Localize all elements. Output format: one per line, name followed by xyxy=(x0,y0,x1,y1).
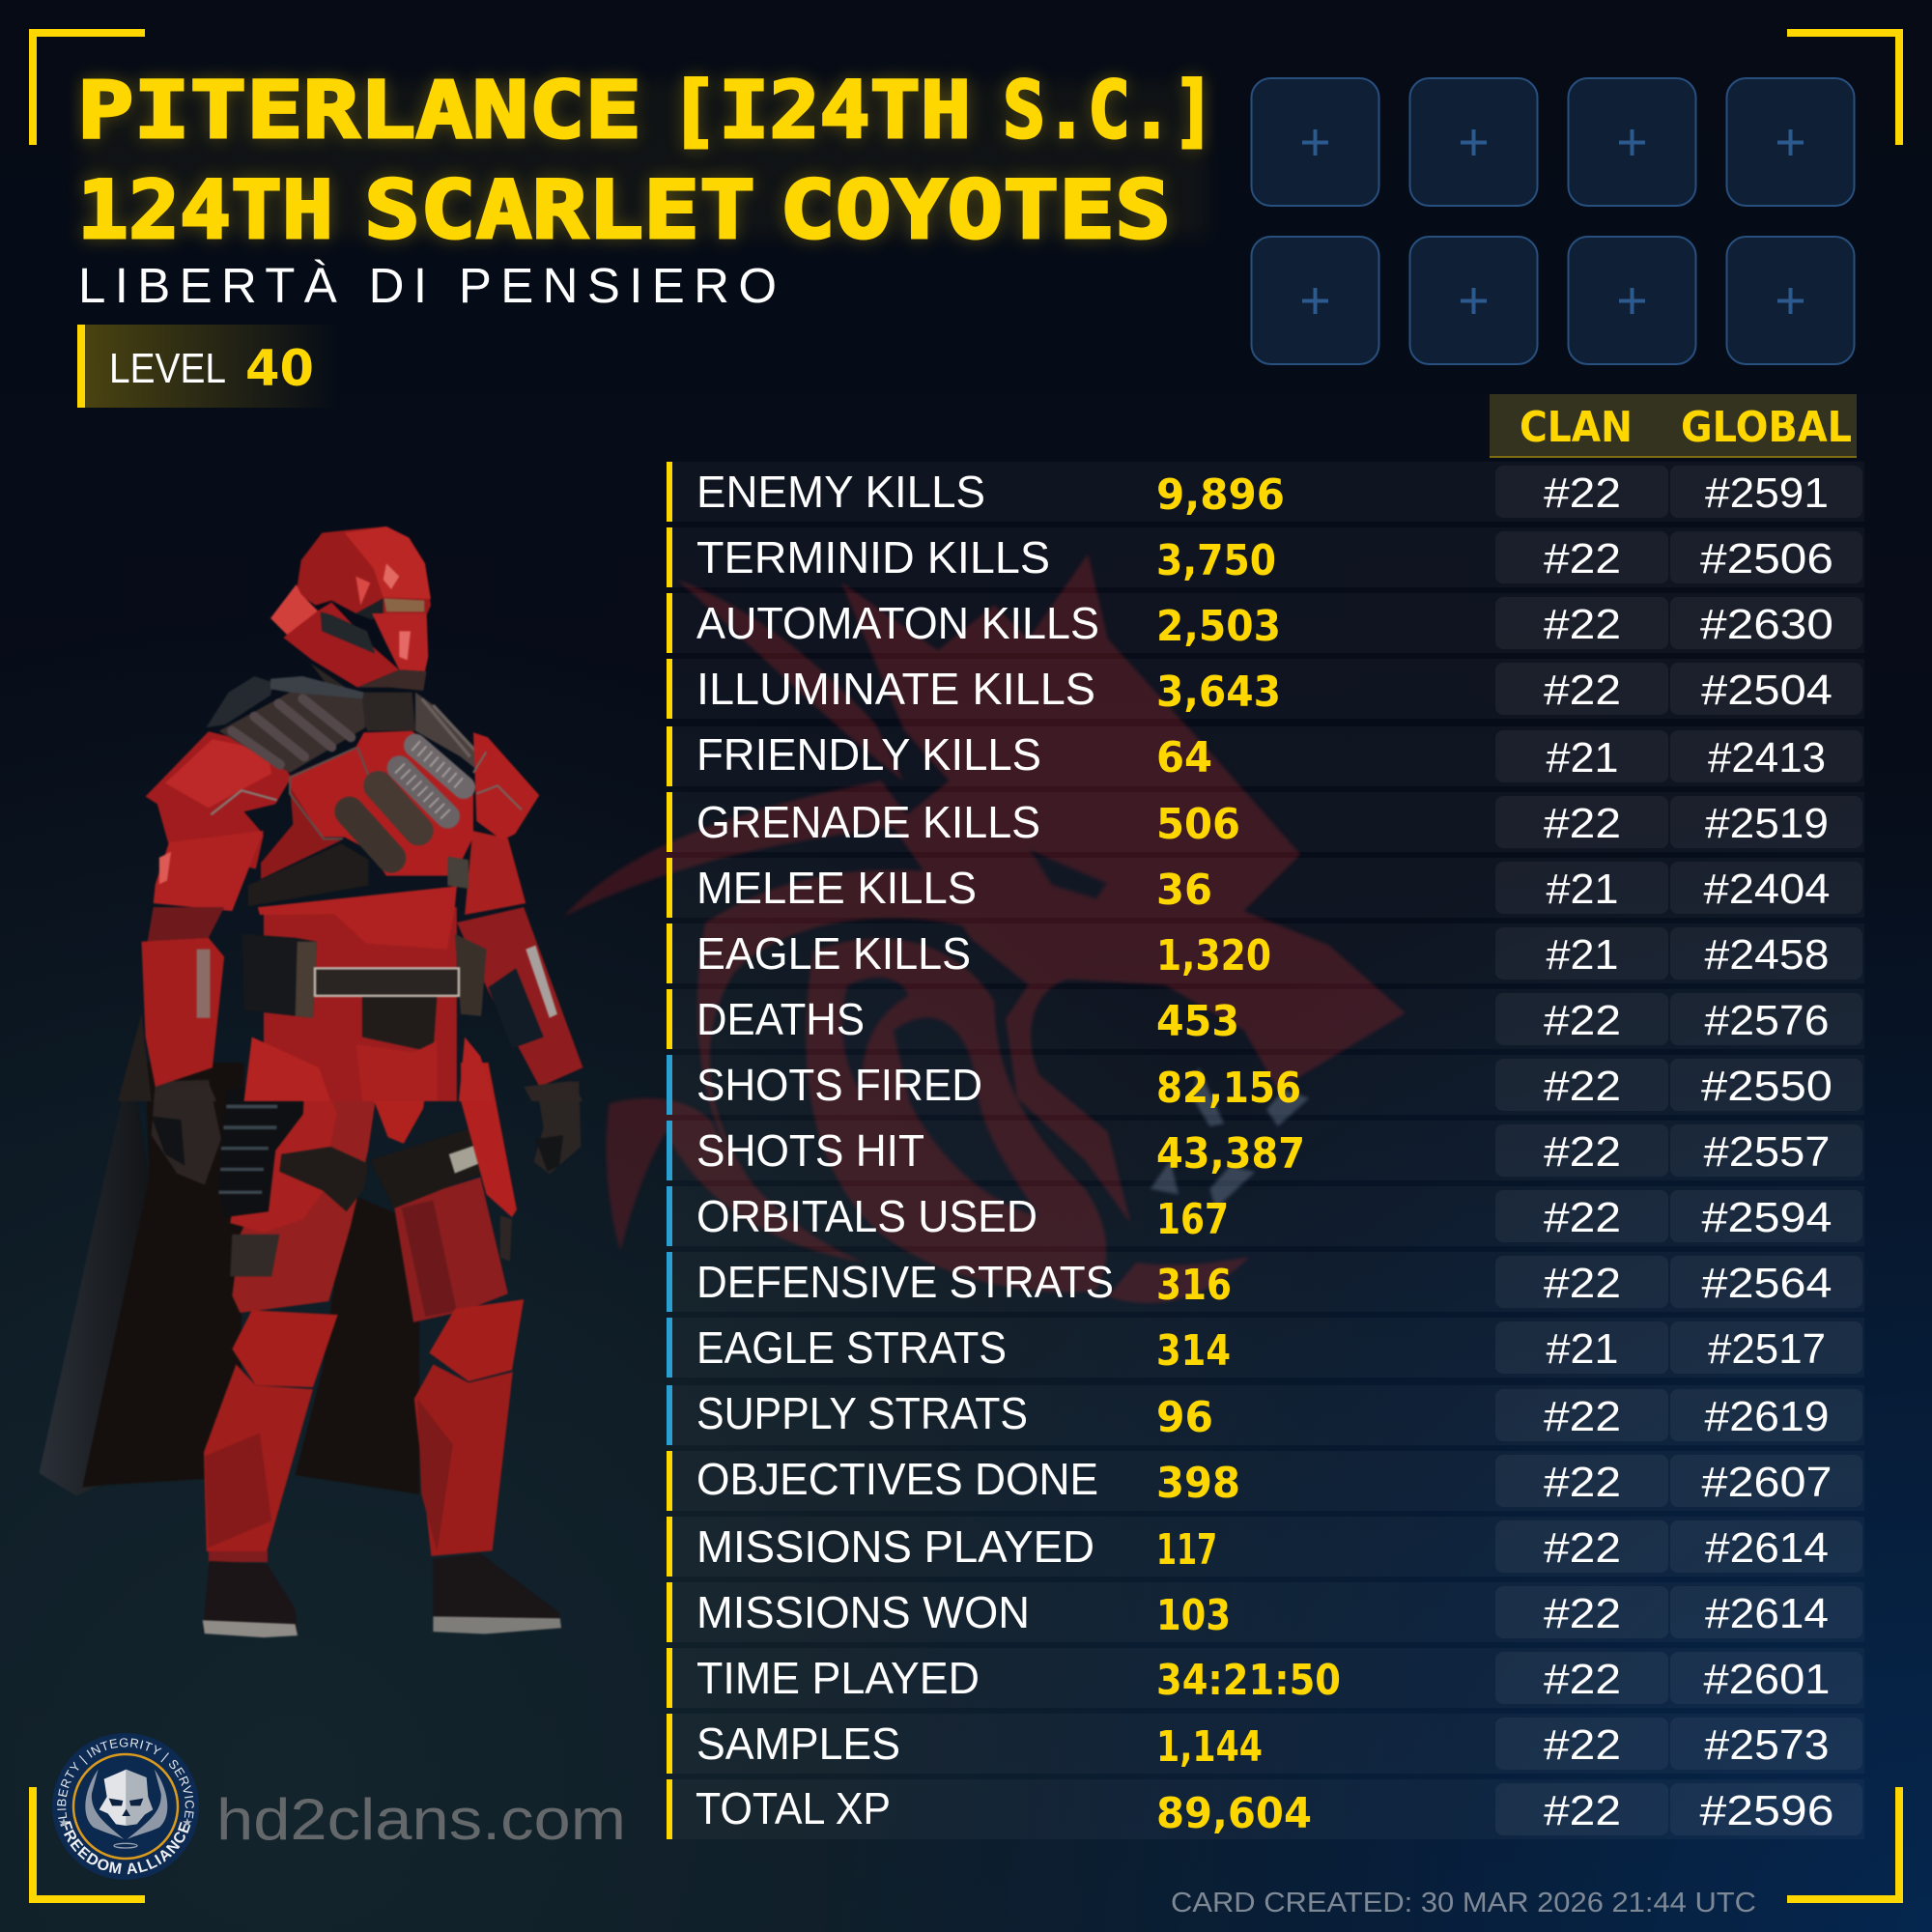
stat row: supply strats: 96 xyxy=(1156,1393,1213,1442)
stat row: objectives done xyxy=(667,1451,1864,1511)
corner bracket top-left xyxy=(29,29,145,145)
level label: LEVEL xyxy=(109,346,226,392)
stat row: objectives done: #22 xyxy=(1544,1460,1621,1506)
stat row: deaths: DEATHS xyxy=(696,994,865,1044)
slot 3 xyxy=(1569,78,1696,206)
stat row: samples: SAMPLES xyxy=(696,1719,900,1769)
stat row: eagle strats: 314 xyxy=(1156,1326,1231,1376)
table column header xyxy=(1490,394,1857,458)
stat row: total xp: 89,604 xyxy=(1156,1789,1312,1838)
slot 7 xyxy=(1569,237,1696,364)
stat row: enemy kills: 9,896 xyxy=(1156,470,1285,520)
global column heading: GLOBAL xyxy=(1681,403,1852,452)
stat row: samples: #22 xyxy=(1544,1722,1621,1769)
stat row: friendly kills: #2413 xyxy=(1708,735,1826,781)
stat row: enemy kills: #2591 xyxy=(1705,470,1829,517)
stat row: missions played xyxy=(667,1517,1864,1577)
stat row: defensive strats: DEFENSIVE STRATS xyxy=(696,1257,1114,1307)
stat row: illuminate kills: ILLUMINATE KILLS xyxy=(696,664,1095,714)
slot 2 xyxy=(1410,78,1538,206)
slot 1 xyxy=(1252,78,1379,206)
stat row: grenade kills: #2519 xyxy=(1705,801,1829,847)
slot 8 xyxy=(1727,237,1855,364)
stat row: deaths xyxy=(667,989,1864,1049)
stat row: friendly kills: #21 xyxy=(1546,735,1619,781)
stat row: objectives done: #2607 xyxy=(1702,1460,1832,1506)
stat row: samples: #2573 xyxy=(1704,1722,1830,1769)
freedom alliance badge xyxy=(52,1733,199,1880)
title line one: player name: PITERLANCE xyxy=(77,66,641,156)
stat row: deaths: #2576 xyxy=(1704,998,1830,1044)
stat row: automaton kills: #2630 xyxy=(1700,602,1833,648)
stat row: friendly kills: FRIENDLY KILLS xyxy=(696,729,1041,780)
stat row: eagle strats: #21 xyxy=(1546,1326,1619,1373)
title line two: clan name: 124TH xyxy=(77,163,333,257)
badge top ring text: LIBERTY | INTEGRITY | SERVICE xyxy=(57,1738,194,1819)
badge skull and laurels xyxy=(85,1770,167,1848)
stat row: samples xyxy=(667,1714,1864,1774)
stat row: objectives done: OBJECTIVES DONE xyxy=(696,1454,1098,1504)
corner bracket top-right xyxy=(1787,29,1903,145)
stat row: illuminate kills xyxy=(667,659,1864,719)
stat row: total xp: #22 xyxy=(1544,1788,1621,1834)
stat row: shots fired: SHOTS FIRED xyxy=(696,1060,982,1110)
stat row: melee kills: #21 xyxy=(1546,867,1619,913)
figure: armored helldiver in red armour and dark cape xyxy=(39,526,582,1637)
stat row: total xp: TOTAL XP xyxy=(696,1783,891,1833)
stat row: supply strats: SUPPLY STRATS xyxy=(696,1388,1028,1438)
stat row: friendly kills: 64 xyxy=(1156,733,1212,782)
stat row: shots hit xyxy=(667,1121,1864,1180)
stat row: time played: #2601 xyxy=(1704,1657,1830,1703)
stat row: grenade kills xyxy=(667,792,1864,852)
stat row: terminid kills: 3,750 xyxy=(1156,536,1276,585)
stat row: enemy kills: #22 xyxy=(1544,470,1621,517)
stat row: missions played: 117 xyxy=(1156,1525,1217,1575)
title glow xyxy=(80,82,1208,237)
stat row: orbitals used xyxy=(667,1186,1864,1246)
stat row: deaths: 453 xyxy=(1156,997,1239,1046)
stat row: melee kills: 36 xyxy=(1156,866,1212,915)
stat row: melee kills: MELEE KILLS xyxy=(696,863,977,913)
stat row: missions won xyxy=(667,1582,1864,1642)
stat row: orbitals used: 167 xyxy=(1156,1195,1229,1244)
stat row: supply strats: #2619 xyxy=(1704,1394,1830,1440)
clan column heading: CLAN xyxy=(1520,403,1633,452)
stat row: terminid kills: #2506 xyxy=(1700,536,1833,582)
stat row: supply strats xyxy=(667,1385,1864,1445)
stat row: missions played: #2614 xyxy=(1705,1525,1829,1572)
subtitle: LIBERTÀ DI PENSIERO xyxy=(78,258,777,313)
stat row: defensive strats xyxy=(667,1252,1864,1312)
title line one: player name xyxy=(77,66,1215,156)
stat row: shots fired xyxy=(667,1055,1864,1115)
stat row: eagle kills: #2458 xyxy=(1704,932,1830,979)
stat row: eagle kills: 1,320 xyxy=(1156,931,1271,980)
stat row: shots fired: #22 xyxy=(1544,1064,1621,1110)
stat row: missions won: #2614 xyxy=(1705,1591,1829,1637)
stat row: enemy kills: ENEMY KILLS xyxy=(696,467,985,517)
stat row: eagle kills: #21 xyxy=(1546,932,1619,979)
stat row: total xp xyxy=(667,1779,1864,1839)
stat row: objectives done: 398 xyxy=(1156,1459,1240,1508)
stat row: terminid kills: TERMINID KILLS xyxy=(696,532,1050,582)
stat row: melee kills xyxy=(667,858,1864,918)
figure torso and arms xyxy=(118,731,582,1101)
title line two: clan name xyxy=(77,163,1171,257)
card created timestamp: CARD CREATED: 30 MAR 2026 21:44 UTC xyxy=(1171,1888,1756,1918)
level badge xyxy=(77,325,338,408)
stat row: missions played: #22 xyxy=(1544,1525,1621,1572)
stat row: missions won: #22 xyxy=(1544,1591,1621,1637)
title line two: clan name: COYOTES xyxy=(780,163,1171,257)
stat row: eagle strats xyxy=(667,1318,1864,1378)
stat row: eagle kills xyxy=(667,923,1864,983)
stat row: eagle strats: #2517 xyxy=(1708,1326,1826,1373)
badge stars: ★ xyxy=(58,1815,70,1830)
stat row: grenade kills: 506 xyxy=(1156,800,1240,849)
stat row: deaths: #22 xyxy=(1544,998,1621,1044)
slot 4 xyxy=(1727,78,1855,206)
site url: hd2clans.com xyxy=(216,1787,626,1852)
stat row: orbitals used: #22 xyxy=(1544,1195,1621,1241)
stat row: time played: TIME PLAYED xyxy=(696,1653,980,1703)
stat row: shots fired: 82,156 xyxy=(1156,1064,1301,1113)
watermark: red coyote clan logo xyxy=(563,554,1406,1303)
stat row: defensive strats: #2564 xyxy=(1702,1261,1832,1307)
title block xyxy=(77,66,1215,313)
stat row: time played: #22 xyxy=(1544,1657,1621,1703)
stat row: shots hit: 43,387 xyxy=(1156,1129,1305,1179)
stat row: shots hit: #22 xyxy=(1544,1129,1621,1176)
stat row: grenade kills: #22 xyxy=(1544,801,1621,847)
stat row: illuminate kills: #22 xyxy=(1544,668,1621,714)
badge stars: ★ xyxy=(182,1815,193,1830)
stat row: orbitals used: #2594 xyxy=(1702,1195,1832,1241)
stat row: grenade kills: GRENADE KILLS xyxy=(696,797,1040,847)
badge bottom ring text: FREEDOM ALLIANCE xyxy=(60,1821,191,1874)
stat row: shots fired: #2550 xyxy=(1701,1064,1833,1110)
figure helmet, shoulders and chest xyxy=(206,526,539,906)
slot 5 xyxy=(1252,237,1379,364)
stat row: shots hit: #2557 xyxy=(1704,1129,1830,1176)
stat row: automaton kills: 2,503 xyxy=(1156,602,1281,651)
stat row: total xp: #2596 xyxy=(1700,1788,1833,1834)
stat row: automaton kills: #22 xyxy=(1544,602,1621,648)
level value: 40 xyxy=(245,340,314,398)
stat row: time played xyxy=(667,1648,1864,1708)
strategem slots grid xyxy=(1252,78,1855,364)
stat row: friendly kills xyxy=(667,726,1864,786)
stat row: illuminate kills: 3,643 xyxy=(1156,668,1281,717)
stat row: supply strats: #22 xyxy=(1544,1394,1621,1440)
stat row: automaton kills: AUTOMATON KILLS xyxy=(696,598,1099,648)
stat row: automaton kills xyxy=(667,593,1864,653)
stat row: samples: 1,144 xyxy=(1156,1722,1263,1772)
stat row: eagle strats: EAGLE STRATS xyxy=(696,1322,1007,1373)
stat row: orbitals used: ORBITALS USED xyxy=(696,1191,1037,1241)
stat row: missions played: MISSIONS PLAYED xyxy=(696,1521,1094,1572)
stat row: terminid kills xyxy=(667,527,1864,587)
stat row: illuminate kills: #2504 xyxy=(1701,668,1833,714)
title line two: clan name: SCARLET xyxy=(364,163,755,257)
stat row: eagle kills: EAGLE KILLS xyxy=(696,928,971,979)
stat row: missions won: 103 xyxy=(1156,1591,1231,1640)
figure lower body xyxy=(39,1063,581,1637)
stat row: defensive strats: 316 xyxy=(1156,1261,1232,1310)
corner bracket bottom-right xyxy=(1787,1787,1903,1903)
stat row: missions won: MISSIONS WON xyxy=(696,1587,1030,1637)
stat row: enemy kills xyxy=(667,462,1864,522)
stat row: melee kills: #2404 xyxy=(1704,867,1830,913)
slot 6 xyxy=(1410,237,1538,364)
corner bracket bottom-left xyxy=(29,1787,145,1903)
title line one: player name: S.C.] xyxy=(1003,66,1215,156)
stat row: terminid kills: #22 xyxy=(1544,536,1621,582)
title line one: player name: [I24TH xyxy=(668,66,971,156)
stat row: time played: 34:21:50 xyxy=(1156,1656,1341,1705)
stat row: defensive strats: #22 xyxy=(1544,1261,1621,1307)
stat row: shots hit: SHOTS HIT xyxy=(696,1125,924,1176)
